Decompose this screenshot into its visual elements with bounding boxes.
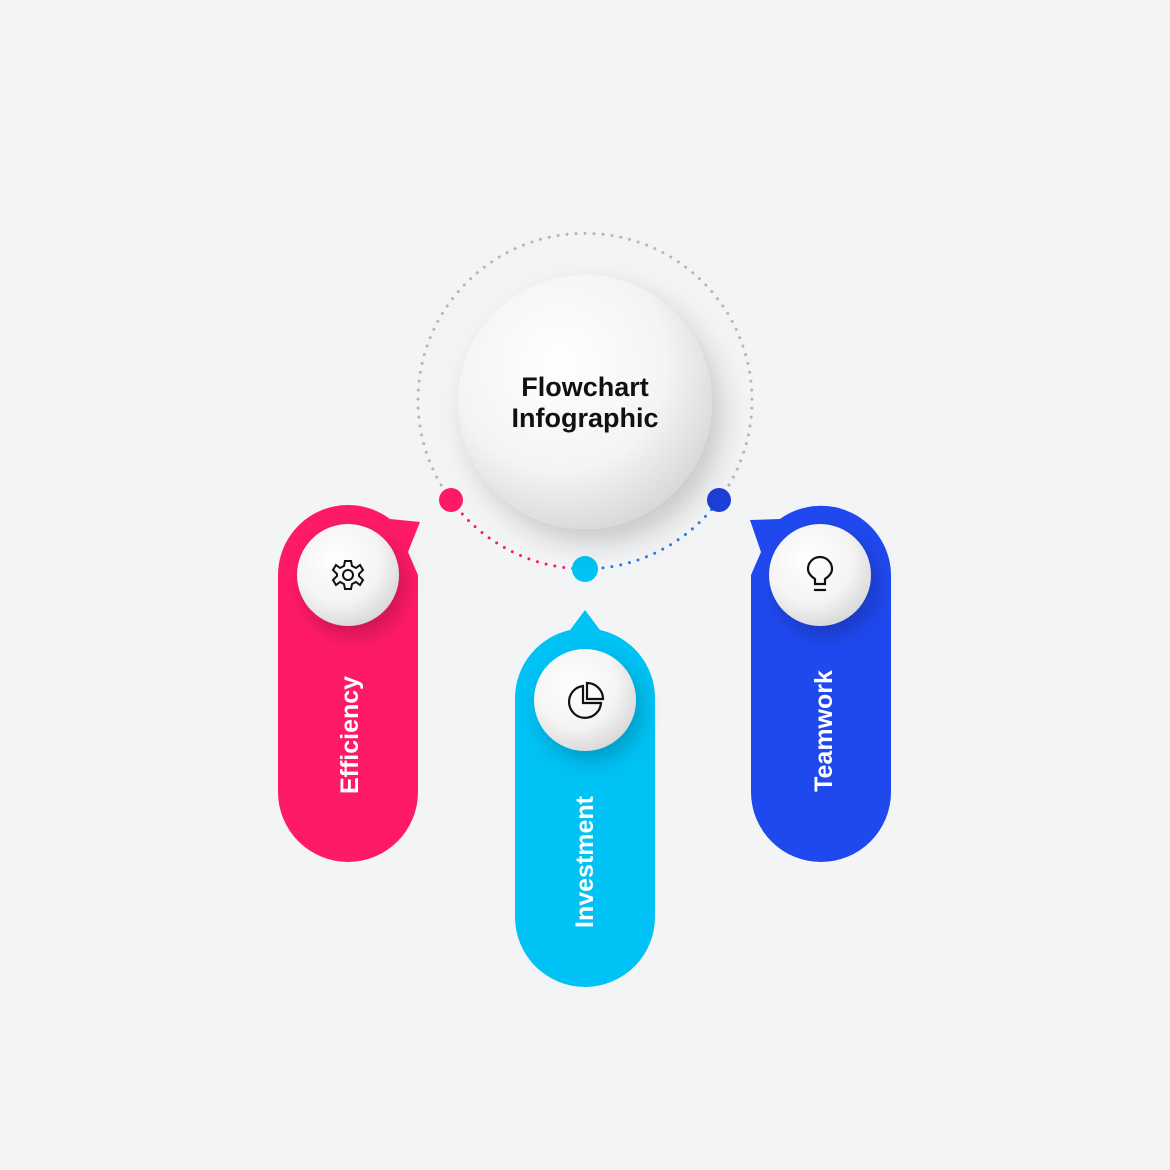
panel: teamwork (750, 506, 891, 862)
icon: pie chart (569, 683, 603, 718)
title: Flowchart (521, 372, 649, 402)
central sphere (458, 275, 712, 529)
panel: efficiency: Efficiency (336, 676, 364, 794)
connector dot: blue (707, 488, 731, 512)
dotted ring (418, 233, 752, 569)
panel: investment: Investment (571, 795, 599, 928)
panel: efficiency (278, 505, 420, 862)
connector dot: cyan (572, 556, 598, 582)
panel: teamwork: Teamwork (810, 670, 838, 792)
icon: lightbulb (808, 557, 832, 590)
text: Infographic (512, 403, 658, 433)
panel: investment (515, 610, 655, 987)
connector dot: red (439, 488, 463, 512)
icon: gear (333, 561, 363, 589)
